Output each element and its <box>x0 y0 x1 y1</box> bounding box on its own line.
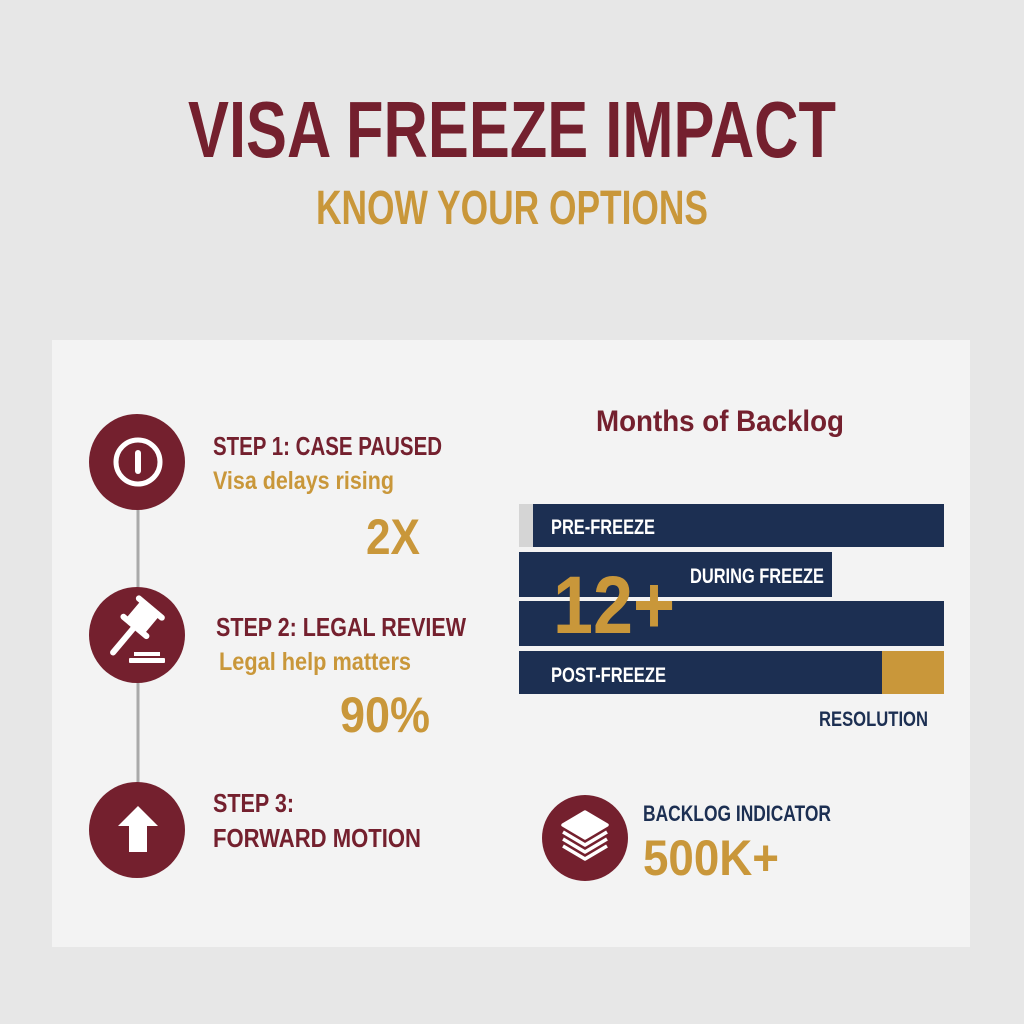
bar chart: POST-FREEZE <box>551 664 666 687</box>
bar chart: 12+ <box>553 560 675 651</box>
icon: layers <box>542 795 628 881</box>
panel: main card <box>52 340 970 947</box>
icon: power/pause <box>89 414 185 510</box>
backlog indicator: 500K+ <box>643 830 779 886</box>
title: VISA FREEZE IMPACT <box>188 85 836 174</box>
step 1: Visa delays rising <box>213 467 394 495</box>
chart title: Months of Backlog <box>596 405 844 438</box>
step 2: STEP 2: LEGAL REVIEW <box>216 612 466 642</box>
step 3: FORWARD MOTION <box>213 823 421 853</box>
step 2 <box>89 587 466 743</box>
bar chart: RESOLUTION <box>819 708 928 731</box>
backlog indicator <box>542 795 831 886</box>
backlog indicator: BACKLOG INDICATOR <box>643 801 831 826</box>
step 1: 2X <box>366 509 420 565</box>
step 2: Legal help matters <box>219 648 411 676</box>
subtitle: KNOW YOUR OPTIONS <box>316 182 708 235</box>
step 1 <box>89 414 442 565</box>
step 3: STEP 3: <box>213 788 294 818</box>
icon: up arrow <box>89 782 185 878</box>
bar chart: DURING FREEZE <box>690 565 824 588</box>
bar chart <box>519 504 944 731</box>
step 1: STEP 1: CASE PAUSED <box>213 431 442 461</box>
bar chart: PRE-FREEZE <box>551 516 655 539</box>
step 3 <box>89 782 421 878</box>
icon: gavel <box>89 587 185 683</box>
step 2: 90% <box>340 687 430 743</box>
timeline connector <box>136 505 140 790</box>
